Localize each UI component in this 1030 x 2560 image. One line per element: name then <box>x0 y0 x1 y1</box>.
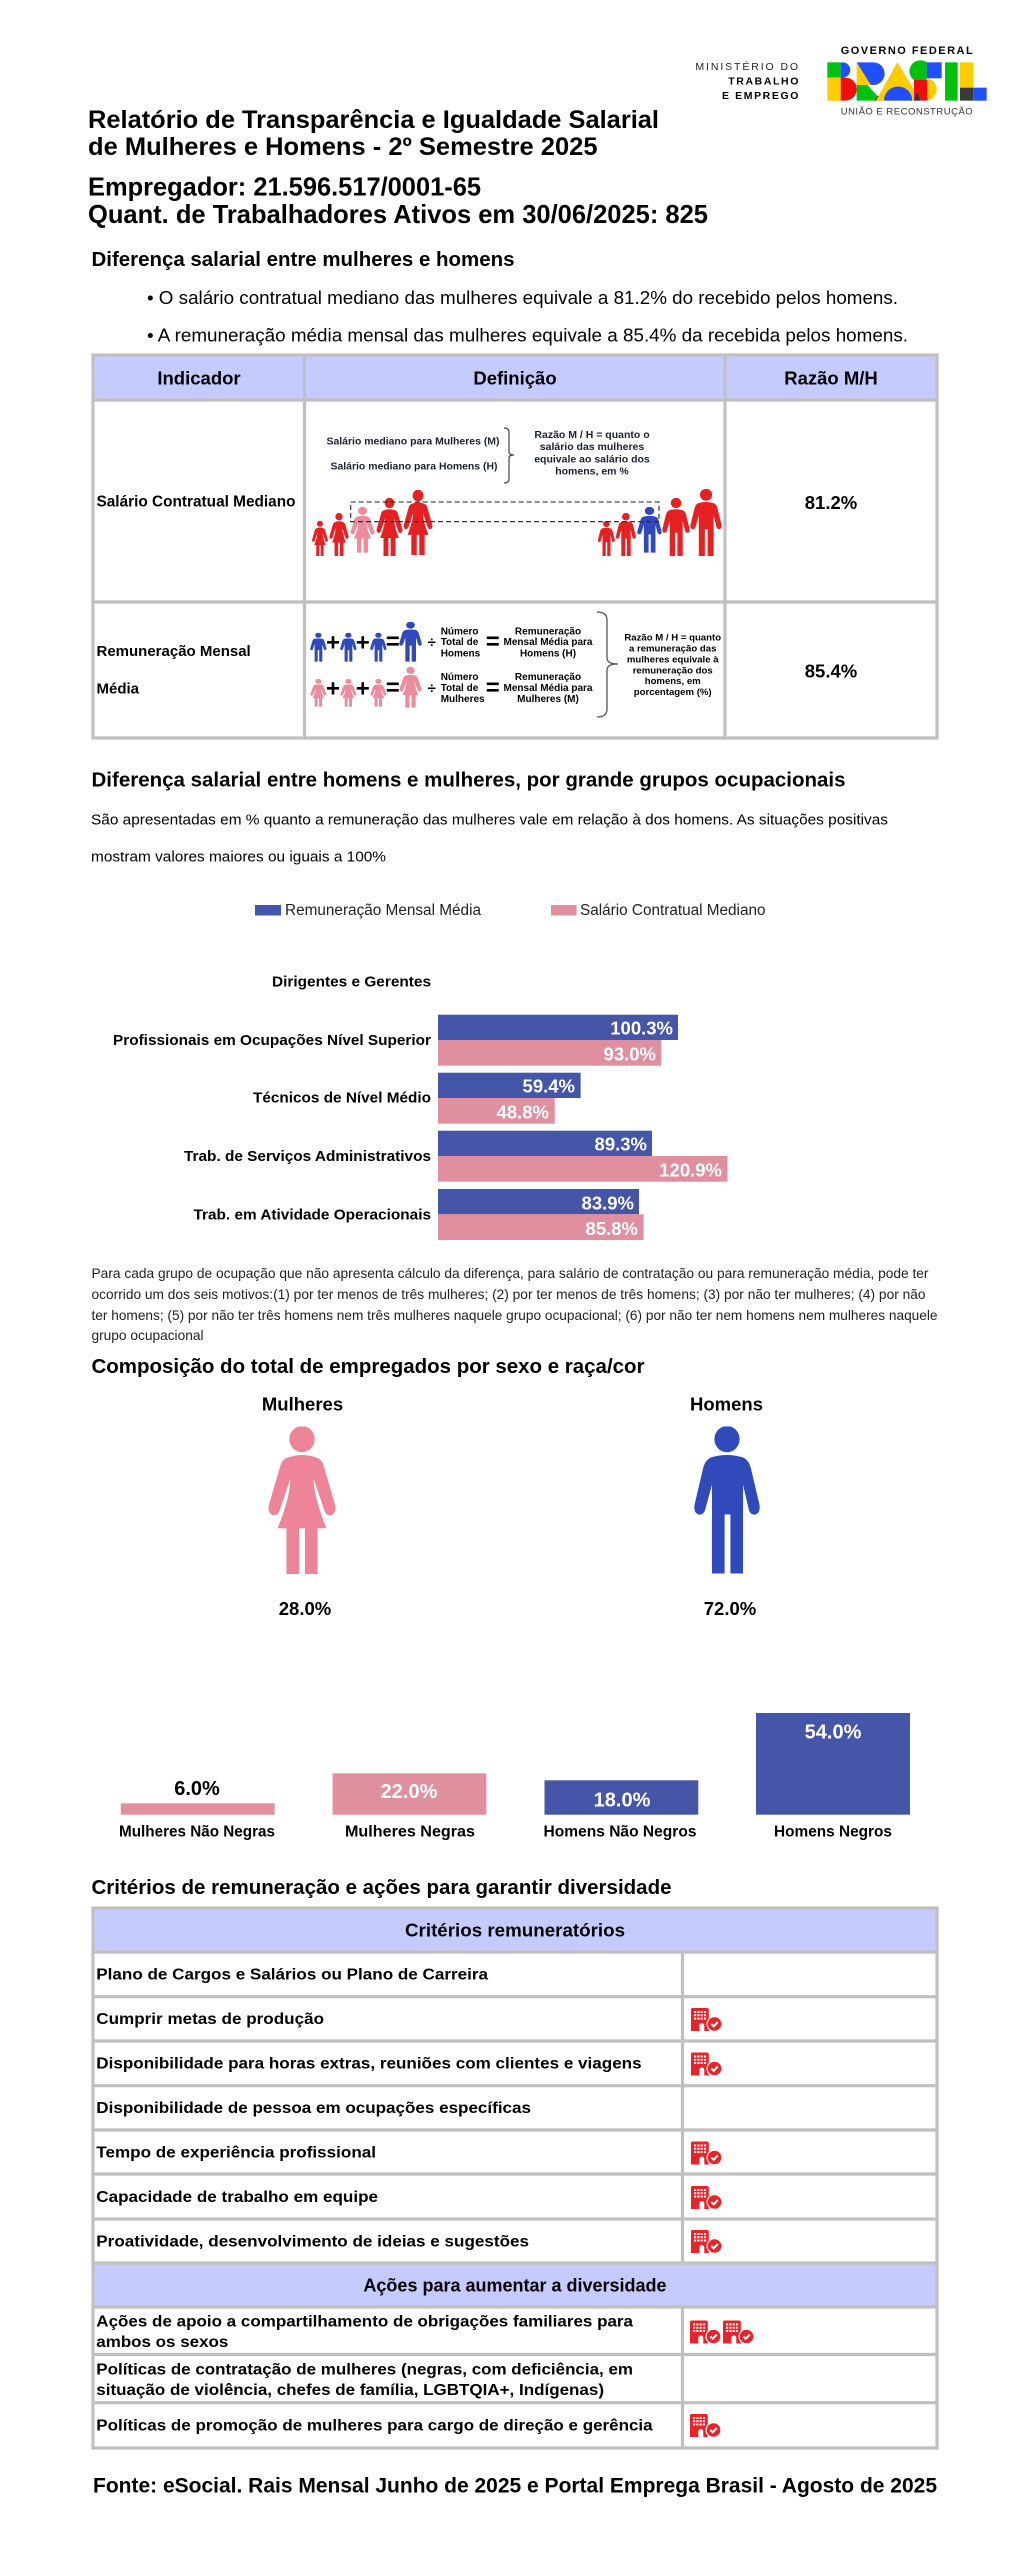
diagram: average remuneration definition: Número <box>441 672 478 683</box>
criterion: proactivity: Proatividade, desenvolvimento de ideias e sugestões <box>96 2234 529 2250</box>
bars: operational activities <box>194 1189 644 1240</box>
diagram: average remuneration definition: Homens (H) <box>520 648 576 660</box>
diagram: average remuneration definition: a remuneração das <box>629 644 716 654</box>
criterion: career plan: Plano de Cargos e Salários ou Plano de Carreira <box>96 1966 488 1984</box>
diagram: average remuneration definition: homens, em <box>645 676 701 687</box>
row label: median salary: Salário Contratual Mediano <box>96 494 296 510</box>
diagram: average remuneration definition: remuneração dos <box>633 666 713 676</box>
action: promotion policies <box>96 2414 722 2438</box>
bar: black women <box>332 1773 486 1840</box>
bar: non-black women: Mulheres Não Negras <box>119 1824 275 1840</box>
diagram: average remuneration definition: = <box>386 628 400 656</box>
legend: Remuneração Mensal Média <box>285 902 481 919</box>
bar: black women: Mulheres Negras <box>345 1824 475 1840</box>
criterion: overtime availability: Disponibilidade para horas extras, reuniões com clientes e viagens <box>96 2056 642 2072</box>
heading: composition: Composição do total de empregados por sexo e raça/cor <box>92 1356 645 1378</box>
logo: Ministério do Trabalho e Emprego: E EMPREGO <box>722 90 800 102</box>
diagram: average remuneration definition: + <box>356 630 370 656</box>
action: hiring policies: situação de violência, chefes de família, LGBTQIA+, Indígenas) <box>96 2382 604 2399</box>
legend <box>255 902 766 919</box>
logo: Ministério do Trabalho e Emprego: MINISTÉRIO DO <box>695 60 800 73</box>
bars: mid-level technicians: Técnicos de Nível Médio <box>253 1090 431 1106</box>
criterion: specific occupations: Disponibilidade de pessoa em ocupações específicas <box>96 2100 531 2117</box>
bars: higher-level professionals: Profissionais em Ocupações Nível Superior <box>113 1032 431 1049</box>
diagram: average remuneration definition: Número <box>441 626 478 638</box>
value: average remuneration ratio: 85.4% <box>805 660 857 682</box>
diagram: median salary definition: Salário mediano para Mulheres (M) <box>326 436 500 448</box>
action: family obligations: Ações de apoio a compartilhamento de obrigações familiares para <box>96 2314 633 2330</box>
diagram: median salary definition: homens, em % <box>555 465 629 477</box>
footnote <box>92 1265 938 1343</box>
source: Fonte: eSocial. Rais Mensal Junho de 2025 e Portal Emprega Brasil - Agosto de 2025 <box>93 2474 937 2498</box>
bars: mid-level technicians <box>253 1073 581 1124</box>
section header: diversity actions <box>93 2263 937 2307</box>
icon: woman <box>268 1426 336 1574</box>
bars: higher-level professionals: 93.0% <box>604 1044 656 1064</box>
bar: black men <box>756 1713 910 1840</box>
bar: non-black men <box>544 1780 698 1840</box>
bar: non-black men: Homens Não Negros <box>544 1824 696 1840</box>
diagram: average remuneration definition: Mulheres <box>441 694 485 705</box>
diagram: median salary definition: Razão M / H = quanto o <box>534 429 650 441</box>
table header row: Definição <box>473 368 557 388</box>
diagram: average remuneration definition: = <box>386 674 400 702</box>
table header row <box>93 355 937 400</box>
action: hiring policies <box>96 2362 633 2399</box>
diagram: median salary definition: salário das mulheres <box>540 441 644 453</box>
logo: Governo Federal Brasil: GOVERNO FEDERAL <box>841 45 973 57</box>
criterion: experience <box>96 2142 723 2166</box>
row label: average remuneration <box>96 643 251 698</box>
diagram: average remuneration definition: Mensal Média para <box>504 637 593 648</box>
heading: criteria: Critérios de remuneração e ações para garantir diversidade <box>92 1877 672 1899</box>
logo: Ministério do Trabalho e Emprego: TRABALHO <box>728 76 800 88</box>
section header: pay criteria <box>93 1908 937 1952</box>
bars: operational activities: Trab. em Atividade Operacionais <box>194 1206 431 1224</box>
bar chart: pay ratio by occupational group <box>113 974 728 1240</box>
diagram: average remuneration definition: Razão M / H = quanto <box>624 632 721 644</box>
diagram: median salary definition <box>312 428 722 556</box>
criterion: teamwork: Capacidade de trabalho em equipe <box>96 2189 378 2206</box>
diagram: average remuneration definition: = <box>486 674 500 702</box>
bars: operational activities: 85.8% <box>586 1218 638 1239</box>
bars: higher-level professionals: 100.3% <box>610 1018 673 1038</box>
diagram: average remuneration definition: + <box>326 630 340 656</box>
bullet list: summary ratios <box>147 288 908 346</box>
icon: man <box>694 1426 760 1574</box>
bars: higher-level professionals <box>113 1015 678 1066</box>
bar: black men: 54.0% <box>805 1722 862 1744</box>
bars: mid-level technicians: 48.8% <box>497 1102 549 1122</box>
criterion: production targets: Cumprir metas de produção <box>96 2011 324 2028</box>
criterion: experience: Tempo de experiência profissional <box>96 2144 376 2162</box>
diagram: average remuneration definition: Mulheres (M) <box>517 694 579 705</box>
footnote: ter homens; (5) por não ter três homens nem três mulheres naquele grupo ocupacional; (6) por não ter nem homens nem mulheres naquele <box>92 1307 938 1323</box>
action: promotion policies: Políticas de promoção de mulheres para cargo de direção e gerência <box>96 2418 653 2434</box>
bars: administrative services: 89.3% <box>595 1134 647 1154</box>
bar: non-black women: 6.0% <box>174 1778 220 1800</box>
logo: Governo Federal Brasil <box>827 45 987 118</box>
logo: Governo Federal Brasil: UNIÃO E RECONSTRUÇÃO <box>841 106 973 118</box>
footnote: ocorrido um dos seis motivos:(1) por ter menos de três mulheres; (2) por ter menos de três homens; (3) por não ter mulheres; (4) por não <box>92 1286 926 1302</box>
bars: administrative services: Trab. de Serviços Administrativos <box>184 1148 431 1165</box>
employer information <box>88 172 708 229</box>
bar: non-black women <box>119 1778 275 1840</box>
heading: salary difference: Diferença salarial entre mulheres e homens <box>92 249 514 271</box>
bar: black men: Homens Negros <box>774 1824 892 1840</box>
criterion: proactivity <box>96 2230 723 2254</box>
title: Relatório de Transparência e Igualdade Salarial <box>88 106 659 134</box>
text block: explanation: São apresentadas em % quanto a remuneração das mulheres vale em relação à dos homens. As situações positivas <box>91 812 888 828</box>
bullet list: summary ratios: • A remuneração média mensal das mulheres equivale a 85.4% da recebida pelos homens. <box>147 326 908 346</box>
diagram: average remuneration definition: mulheres equivale à <box>627 654 719 666</box>
diagram: median salary definition: Salário mediano para Homens (H) <box>330 461 498 473</box>
panel: women share: 28.0% <box>279 1598 331 1619</box>
value: median salary ratio: 81.2% <box>805 492 857 513</box>
bullet list: summary ratios: • O salário contratual mediano das mulheres equivale a 81.2% do recebido pelos homens. <box>147 288 898 308</box>
diagram: median salary definition: equivale ao salário dos <box>534 453 650 465</box>
diagram: average remuneration definition: + <box>326 676 340 702</box>
employer information: Empregador: 21.596.517/0001-65 <box>88 172 481 202</box>
legend: Salário Contratual Mediano <box>580 902 766 919</box>
panel: women share <box>262 1394 343 1619</box>
criterion: overtime availability <box>96 2052 723 2076</box>
bar: non-black men: 18.0% <box>594 1790 651 1812</box>
diagram: average remuneration definition: Total de <box>441 683 479 694</box>
section header: pay criteria: Critérios remuneratórios <box>405 1920 625 1940</box>
title <box>88 106 659 161</box>
bars: mid-level technicians: 59.4% <box>523 1076 575 1096</box>
diagram: average remuneration definition: Remuneração <box>515 626 581 638</box>
action: family obligations: ambos os sexos <box>96 2334 228 2351</box>
section header: diversity actions: Ações para aumentar a diversidade <box>363 2276 667 2296</box>
bars: administrative services <box>184 1131 728 1182</box>
panel: criteria and actions table <box>93 1908 937 2448</box>
employer information: Quant. de Trabalhadores Ativos em 30/06/2025: 825 <box>88 199 708 229</box>
bar: black women: 22.0% <box>381 1781 438 1803</box>
title: de Mulheres e Homens - 2º Semestre 2025 <box>88 133 598 161</box>
diagram: average remuneration definition: + <box>356 676 370 702</box>
diagram: average remuneration definition: ÷ <box>428 634 436 651</box>
diagram: average remuneration definition <box>310 612 721 717</box>
action: family obligations <box>96 2314 755 2351</box>
logo: Ministério do Trabalho e Emprego <box>695 60 800 102</box>
table header row: Indicador <box>157 368 241 388</box>
diagram: average remuneration definition: Homens <box>441 648 481 660</box>
footnote: Para cada grupo de ocupação que não apresenta cálculo da diferença, para salário de contratação ou para remuneração média, pode ter <box>92 1265 929 1281</box>
criterion: production targets <box>96 2008 723 2032</box>
bar chart: composition by sex and race <box>119 1713 910 1840</box>
footnote: grupo ocupacional <box>92 1327 204 1343</box>
diagram: average remuneration definition: Mensal Média para <box>504 683 593 694</box>
diagram: average remuneration definition: ÷ <box>428 680 436 697</box>
table header row: Razão M/H <box>784 368 878 388</box>
row label: average remuneration: Média <box>96 680 140 698</box>
panel: indicators table <box>93 355 937 738</box>
bars: administrative services: 120.9% <box>659 1160 722 1180</box>
diagram: average remuneration definition: Total de <box>441 637 479 648</box>
criterion: teamwork <box>96 2186 723 2210</box>
panel: men share: 72.0% <box>704 1598 756 1619</box>
diagram: average remuneration definition: Remuneração <box>515 672 581 683</box>
panel: women share: Mulheres <box>262 1394 343 1414</box>
diagram: average remuneration definition: = <box>486 628 500 656</box>
panel: men share <box>690 1394 763 1619</box>
action: hiring policies: Políticas de contratação de mulheres (negras, com deficiência, em <box>96 2362 633 2378</box>
text block: explanation: mostram valores maiores ou iguais a 100% <box>91 848 386 866</box>
text block: explanation <box>91 812 888 866</box>
heading: occupational groups: Diferença salarial entre homens e mulheres, por grande grupos ocupacionais <box>92 770 846 792</box>
diagram: average remuneration definition: porcentagem (%) <box>634 687 712 698</box>
panel: men share: Homens <box>690 1394 763 1414</box>
category label: managers: Dirigentes e Gerentes <box>272 974 431 990</box>
row label: average remuneration: Remuneração Mensal <box>96 643 251 660</box>
bars: operational activities: 83.9% <box>582 1192 634 1214</box>
